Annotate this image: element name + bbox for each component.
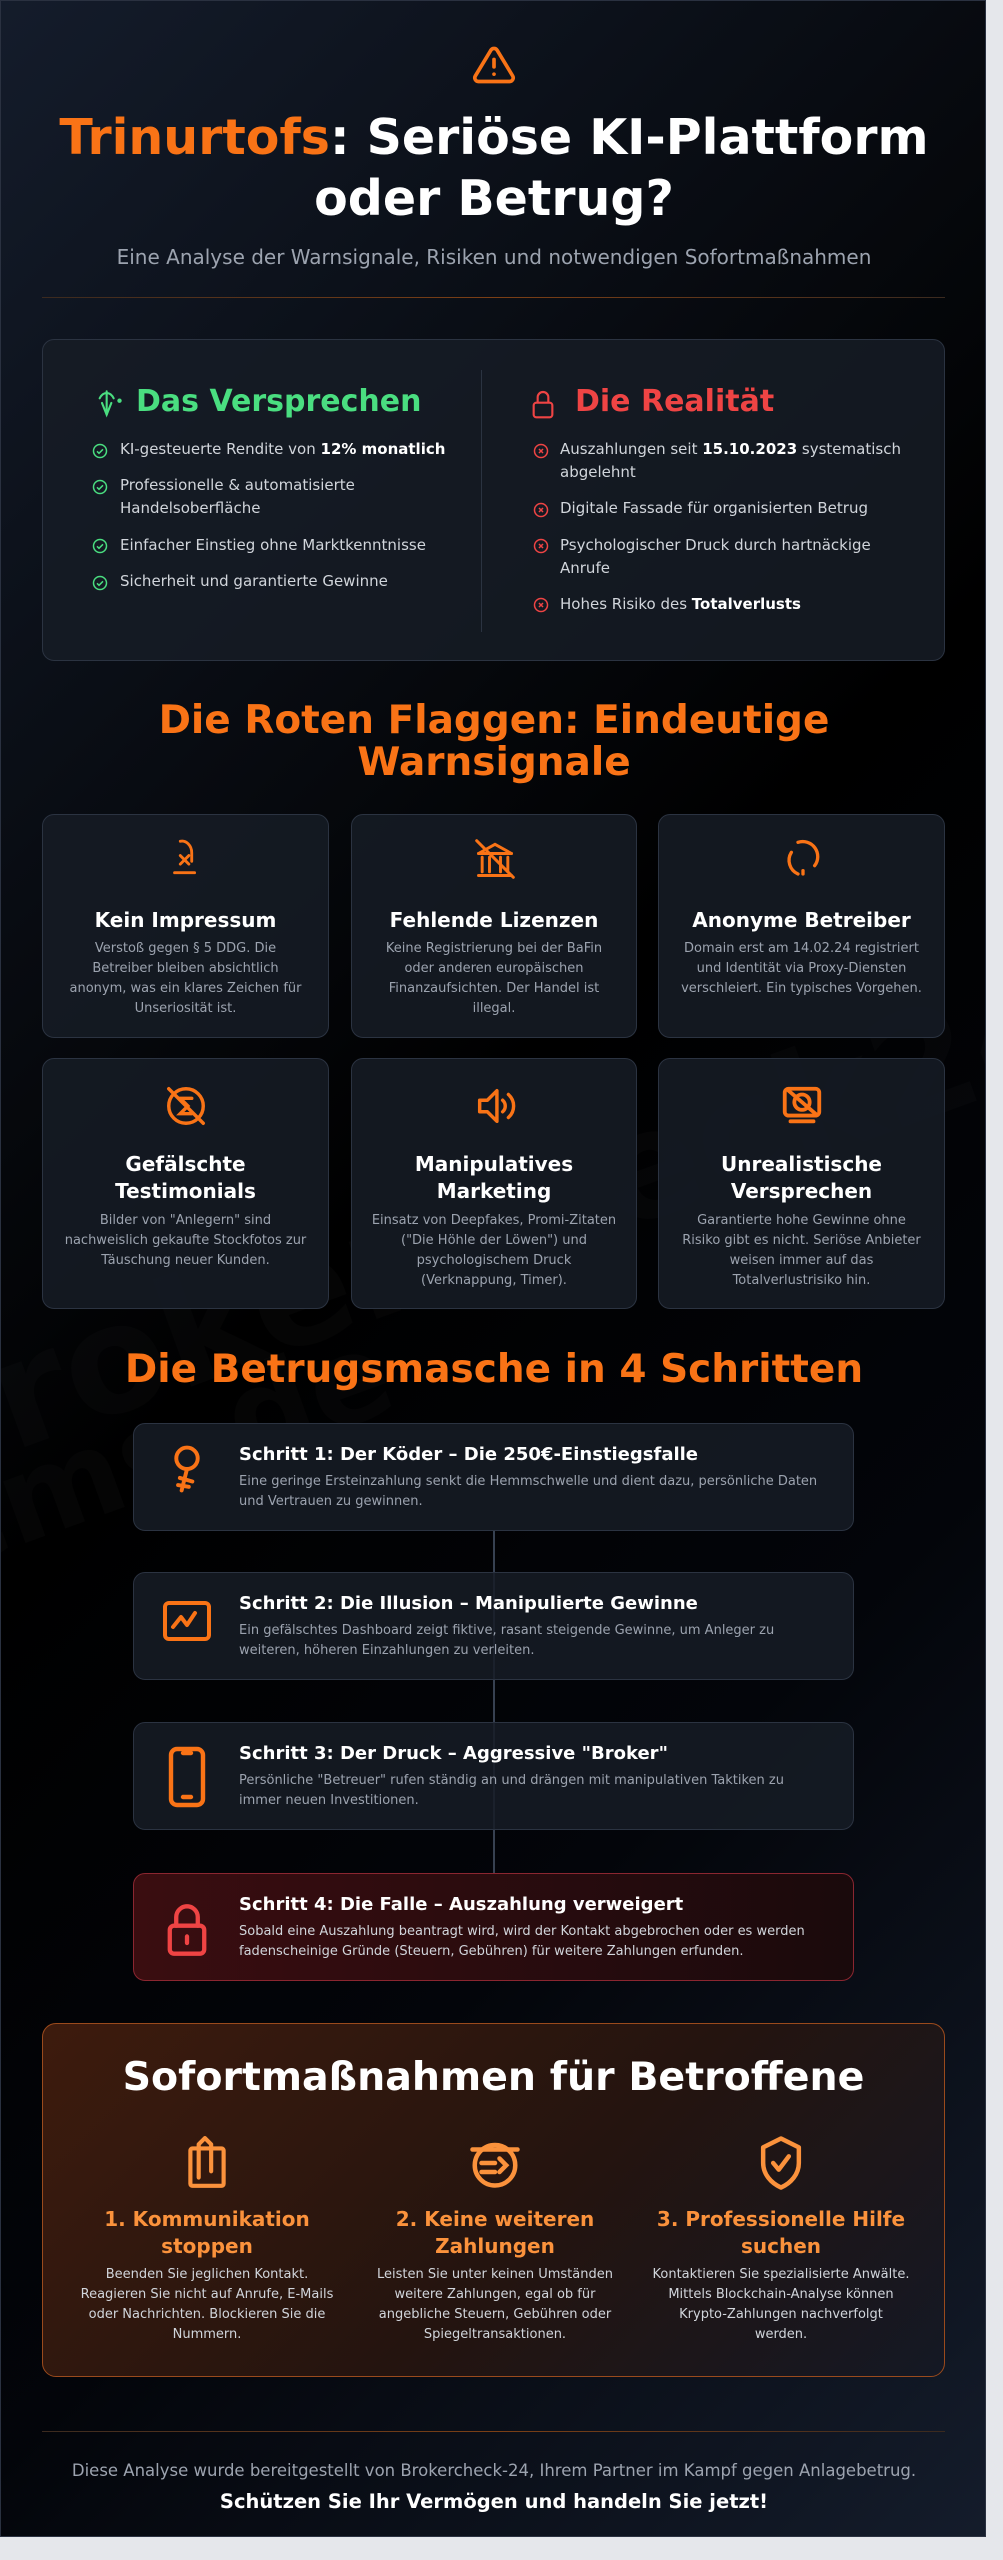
action 1: stoppen	[161, 2234, 253, 2258]
card: Kein Impressum: Verstoß gegen § 5 DDG. Die Betreiber bleiben absichtlich anonym, was ein klares Zeichen für Unseriosität ist.	[69, 941, 302, 1016]
step 3	[133, 1722, 854, 1830]
list: reality: Digitale Fassade für organisierten Betrug	[560, 499, 868, 517]
panel: immediate actions	[42, 2023, 945, 2377]
card: Anonyme Betreiber: Domain erst am 14.02.24 registriert und Identität via Proxy-Diensten verschleiert. Ein typisches Vorgehen.	[681, 941, 922, 996]
title	[59, 109, 929, 227]
action 2	[377, 2142, 613, 2342]
card: Anonyme Betreiber: Anonyme Betreiber	[692, 908, 911, 932]
card: Manipulatives Marketing: Einsatz von Deepfakes, Promi-Zitaten ("Die Höhle der Löwen") und psychologischem Druck (Verknappung, Timer).	[372, 1213, 616, 1288]
heading: 4 steps: Die Betrugsmasche in 4 Schritten	[125, 1347, 863, 1392]
card: Gefälschte Testimonials: Gefälschte	[125, 1152, 246, 1176]
step 1	[133, 1423, 854, 1531]
action 2: 2. Keine weiteren	[396, 2207, 594, 2231]
card: Manipulatives Marketing: Manipulatives	[415, 1152, 573, 1176]
step 4: Schritt 4: Die Falle – Auszahlung verweigert	[239, 1894, 683, 1915]
action 1	[81, 2136, 333, 2342]
list: promises: KI-gesteuerte Rendite von 12% monatlich	[120, 440, 445, 458]
action 3: 3. Professionelle Hilfe	[657, 2207, 905, 2231]
step 3: Schritt 3: Der Druck – Aggressive "Broker"	[239, 1743, 668, 1764]
step 1: Schritt 1: Der Köder – Die 250€-Einstiegsfalle	[239, 1444, 698, 1465]
card: Unrealistische Versprechen	[658, 1058, 945, 1309]
panel: promise vs reality	[42, 339, 945, 661]
step 3: Persönliche "Betreuer" rufen ständig an und drängen mit manipulativen Taktiken zu immer neuen Investitionen.	[239, 1773, 784, 1808]
list: promises: Einfacher Einstieg ohne Marktkenntnisse	[120, 536, 426, 554]
action 1: 1. Kommunikation	[104, 2207, 310, 2231]
title: oder Betrug?	[314, 170, 674, 227]
list: reality	[534, 440, 901, 613]
heading: Die Realität: Die Realität	[575, 384, 774, 419]
action 2: Leisten Sie unter keinen Umständen weitere Zahlungen, egal ob für angebliche Steuern, Gebühren oder Spiegeltransaktionen.	[377, 2267, 613, 2342]
action 3	[653, 2136, 909, 2342]
action 3: Kontaktieren Sie spezialisierte Anwälte. Mittels Blockchain-Analyse können Krypto-Zahlungen nachverfolgt werden.	[653, 2267, 909, 2342]
card: Manipulatives Marketing: Marketing	[437, 1179, 551, 1203]
card: Manipulatives Marketing	[351, 1058, 637, 1309]
card: Kein Impressum	[42, 814, 329, 1038]
action 1: Beenden Sie jeglichen Kontakt. Reagieren Sie nicht auf Anrufe, E-Mails oder Nachrichten. Blockieren Sie die Nummern.	[81, 2267, 333, 2342]
card: Unrealistische Versprechen: Unrealistische	[721, 1152, 882, 1176]
footer call to action: Schützen Sie Ihr Vermögen und handeln Sie jetzt!	[220, 2490, 768, 2513]
card: Fehlende Lizenzen: Keine Registrierung bei der BaFin oder anderen europäischen Finanzaufsichten. Der Handel ist illegal.	[386, 941, 602, 1016]
card: Gefälschte Testimonials: Testimonials	[115, 1179, 256, 1203]
step 1: Eine geringe Ersteinzahlung senkt die Hemmschwelle und dient dazu, persönliche Daten und Vertrauen zu gewinnen.	[239, 1474, 817, 1509]
step 4: Sobald eine Auszahlung beantragt wird, wird der Kontakt abgebrochen oder es werden fadenscheinige Gründe (Steuern, Gebühren) für weitere Zahlungen erfunden.	[239, 1924, 805, 1959]
card: Unrealistische Versprechen: Garantierte hohe Gewinne ohne Risiko gibt es nicht. Seriöse Anbieter weisen immer auf das Totalverlustrisiko hin.	[682, 1213, 921, 1288]
list: promises: Handelsoberfläche	[120, 499, 260, 517]
heading: Das Versprechen: Das Versprechen	[136, 384, 421, 419]
list: promises: Professionelle & automatisierte	[120, 476, 355, 494]
list: reality: Psychologischer Druck durch hartnäckige	[560, 536, 871, 554]
list: reality: Auszahlungen seit 15.10.2023 systematisch	[560, 440, 901, 458]
card: Fehlende Lizenzen: Fehlende Lizenzen	[390, 908, 598, 932]
heading: red flags	[159, 698, 829, 785]
step 2	[133, 1572, 854, 1680]
list: reality: Hohes Risiko des Totalverlusts	[560, 595, 801, 613]
title: Trinurtofs: Seriöse KI-Plattform	[59, 109, 929, 166]
card: Fehlende Lizenzen	[351, 814, 637, 1038]
step 4	[133, 1873, 854, 1981]
list: reality: abgelehnt	[560, 463, 636, 481]
list: promises	[92, 440, 445, 590]
list: promises: Sicherheit und garantierte Gewinne	[120, 572, 388, 590]
icon: warning	[472, 46, 516, 84]
heading: red flags: Warnsignale	[357, 740, 631, 785]
card: Anonyme Betreiber	[658, 814, 945, 1038]
subtitle: Eine Analyse der Warnsignale, Risiken und notwendigen Sofortmaßnahmen	[117, 245, 871, 269]
list: reality: Anrufe	[560, 559, 610, 577]
card: Unrealistische Versprechen: Versprechen	[731, 1179, 872, 1203]
step 2: Schritt 2: Die Illusion – Manipulierte Gewinne	[239, 1593, 698, 1614]
heading: red flags: Die Roten Flaggen: Eindeutige	[159, 698, 829, 743]
heading: Sofortmaßnahmen für Betroffene	[123, 2054, 864, 2100]
action 3: suchen	[741, 2234, 821, 2258]
timeline connector	[493, 1531, 495, 1873]
action 2: Zahlungen	[435, 2234, 555, 2258]
card: Gefälschte Testimonials: Bilder von "Anlegern" sind nachweislich gekaufte Stockfotos zur Täuschung neuer Kunden.	[65, 1213, 306, 1268]
card: Kein Impressum: Kein Impressum	[95, 908, 276, 932]
card: Gefälschte Testimonials	[42, 1058, 329, 1309]
footer text: Diese Analyse wurde bereitgestellt von Brokercheck-24, Ihrem Partner im Kampf gegen Anlagebetrug.	[72, 2461, 916, 2480]
step 2: Ein gefälschtes Dashboard zeigt fiktive, rasant steigende Gewinne, um Anleger zu weiteren, höheren Einzahlungen zu verleiten.	[239, 1623, 774, 1658]
